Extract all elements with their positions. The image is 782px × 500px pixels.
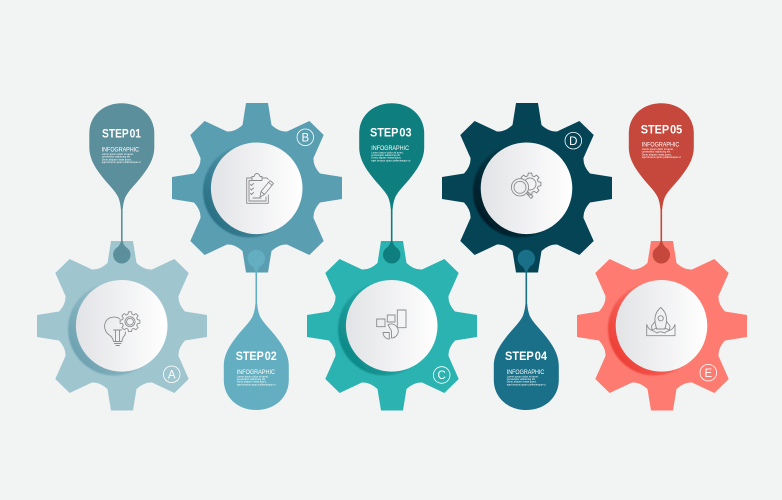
callout: step 05 [629,103,694,264]
badge B [297,129,314,146]
badge C [433,367,450,383]
step 05 text: consectetur adipiscing elit. [642,150,671,154]
gear C disc [346,280,438,372]
step 03 text: STEP 03 [370,126,412,140]
step 01 text: Donec aliquam massa ipsum, [102,157,132,161]
step 05 drop [629,103,694,209]
step 04 text: Lorem ipsum dolor sit amet, [507,374,539,378]
icon: charts [377,310,406,339]
badge C: C [438,370,446,382]
step 03 text: consectetur adipiscing elit. [371,153,401,157]
step 02 connector [248,250,265,312]
badge B: B [301,132,309,144]
gear B disc [211,142,302,234]
gear E disc [616,280,707,372]
icon: rocket [647,308,675,336]
step 03 text: INFOGRAPHIC [371,145,409,152]
step 05 text: INFOGRAPHIC [642,142,680,149]
step 04 text: STEP 04 [505,349,547,363]
step 01 text: STEP 01 [102,127,141,141]
gear C disc shadow [338,282,431,376]
step 04 text: Donec aliquam massa ipsum, [507,380,537,384]
step 02 text [236,349,277,386]
badge E [700,364,717,381]
icon: light bulb with cog [105,312,140,346]
step 03 text [370,126,412,162]
callout: step 01 [89,103,154,264]
callout: step 02 [224,250,289,410]
gear C body [307,241,477,410]
step 03 drop [359,103,424,209]
step 02 text: eget tempus quam pellentesque ut [237,382,276,386]
step 02 text: STEP 02 [236,349,277,363]
step 02 text: consectetur adipiscing elit. [237,377,266,381]
gear A disc [76,280,168,372]
step 04 text [505,349,547,386]
badge A: A [168,369,176,381]
badge D: D [569,136,577,148]
gear D disc [481,142,572,234]
step 01 text [102,127,141,164]
step 05 text: STEP 05 [641,122,683,136]
step 04 text: eget tempus quam pellentesque ut [507,382,546,386]
step 04 drop [494,304,559,410]
panel: gear B [172,103,342,272]
step 01 drop [89,103,154,209]
gear A disc shadow [68,282,161,376]
step 05 connector [653,200,670,264]
step 02 text: Lorem ipsum dolor sit amet, [237,374,269,378]
step 02 text: INFOGRAPHIC [237,369,275,376]
step 04 connector [518,250,535,312]
step 01 connector [113,200,130,264]
icon: magnifier with cog [511,173,541,198]
gear D body [442,103,612,272]
icon: clipboard with pencil [247,174,274,203]
step 05 text: Donec aliquam massa ipsum, [642,152,672,156]
step 02 text: Donec aliquam massa ipsum, [237,380,267,384]
step 01 text: eget tempus quam pellentesque ut [102,160,141,164]
panel: gear C [307,241,477,410]
step 02 drop [224,304,289,410]
step 04 text: INFOGRAPHIC [507,369,545,376]
callout: step 04 [494,250,559,410]
step 05 text [641,122,683,159]
gear B disc shadow [203,144,296,238]
step 03 connector [383,200,400,264]
gear E body [577,241,747,410]
gear B body [172,103,342,272]
gear A body [37,241,207,410]
step 03 text: Lorem ipsum dolor sit amet, [371,150,404,154]
badge A [163,366,180,383]
step 05 text: eget tempus quam pellentesque ut [642,155,681,159]
step 01 text: consectetur adipiscing elit. [102,155,131,159]
step 01 text: INFOGRAPHIC [102,147,139,154]
step 01 text: Lorem ipsum dolor sit amet, [102,152,134,156]
panel: gear A [37,241,207,410]
panel: gear D [442,103,612,272]
step 03 text: Donec aliquam massa ipsum, [371,156,402,160]
panel: gear E [577,241,747,410]
gear E disc shadow [608,282,701,376]
callout: step 03 [359,103,424,264]
step 04 text: consectetur adipiscing elit. [507,377,536,381]
gear D disc shadow [473,144,566,238]
badge D [565,132,582,149]
step 05 text: Lorem ipsum dolor sit amet, [642,147,674,151]
badge E: E [704,368,712,380]
step 03 text: eget tempus quam pellentesque ut [371,158,411,162]
